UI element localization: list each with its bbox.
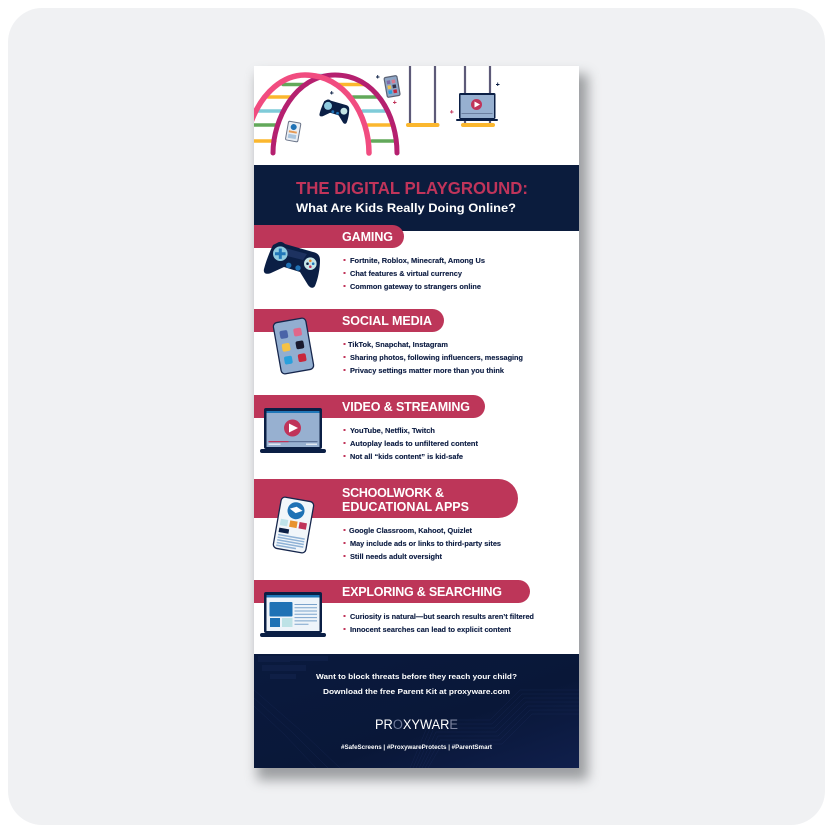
illustration: playground header	[250, 66, 500, 153]
swing two with laptop	[456, 66, 498, 127]
small school phone	[285, 121, 301, 142]
header band	[254, 165, 579, 231]
icon: tablet phone with school app	[273, 497, 314, 553]
gaming banner	[254, 225, 404, 248]
schoolwork bullets: Still needs adult oversight	[350, 552, 443, 561]
schoolwork bullets: Google Classroom, Kahoot, Quizlet	[349, 526, 473, 535]
exploring bullets	[344, 612, 534, 634]
section: gaming	[254, 225, 485, 291]
call to action	[316, 672, 517, 696]
social media heading: SOCIAL MEDIA	[342, 314, 432, 328]
schoolwork bullets: May include ads or links to third-party sites	[350, 539, 501, 548]
video bullets: Not all “kids content” is kid-safe	[350, 452, 463, 461]
exploring bullets: Curiosity is natural—but search results aren’t filtered	[350, 612, 534, 621]
magenta arch	[273, 75, 397, 153]
schoolwork banner	[254, 479, 518, 518]
social media banner	[254, 309, 444, 332]
video heading: VIDEO & STREAMING	[342, 400, 470, 414]
small game controller	[319, 99, 349, 124]
footer panel	[254, 654, 579, 768]
icon: laptop with search results	[260, 592, 326, 637]
icon: laptop with video player	[260, 408, 326, 453]
social media bullets: TikTok, Snapchat, Instagram	[348, 340, 448, 349]
hashtags: #SafeScreens | #ProxywareProtects | #ParentSmart	[341, 745, 492, 751]
video bullets	[344, 426, 479, 461]
call to action: Want to block threats before they reach your child?	[316, 672, 517, 681]
subtitle: What Are Kids Really Doing Online?	[296, 201, 516, 215]
logo: Proxyware: PROXYWARE	[375, 717, 458, 732]
gaming bullets	[344, 256, 485, 291]
section: exploring and searching	[254, 580, 534, 637]
icon: game controller	[264, 242, 320, 288]
swing one	[406, 66, 440, 127]
exploring bullets: Innocent searches can lead to explicit content	[350, 625, 512, 634]
call to action: Download the free Parent Kit at proxyware.com	[323, 687, 510, 696]
panel drop shadow	[257, 74, 588, 780]
gaming heading: GAMING	[342, 230, 393, 244]
pink arch	[250, 75, 369, 153]
social media bullets: Privacy settings matter more than you think	[350, 366, 505, 375]
section: schoolwork and educational apps	[254, 479, 518, 561]
title: THE DIGITAL PLAYGROUND:	[296, 178, 528, 198]
sparkles	[330, 75, 500, 114]
schoolwork bullets	[344, 526, 501, 561]
small social phone	[384, 76, 400, 97]
gaming bullets: Fortnite, Roblox, Minecraft, Among Us	[350, 256, 485, 265]
social media bullets	[344, 340, 523, 375]
exploring banner	[254, 580, 530, 603]
video bullets: YouTube, Netflix, Twitch	[350, 426, 435, 435]
section: social media	[254, 309, 523, 375]
section: video and streaming	[254, 395, 485, 461]
schoolwork heading: SCHOOLWORK &	[342, 486, 444, 500]
video bullets: Autoplay leads to unfiltered content	[350, 439, 479, 448]
exploring heading: EXPLORING & SEARCHING	[342, 585, 502, 599]
gaming bullets: Common gateway to strangers online	[350, 282, 481, 291]
monkey bar rungs	[250, 76, 396, 141]
social media bullets: Sharing photos, following influencers, messaging	[350, 353, 523, 362]
icon: smartphone with apps	[273, 318, 314, 374]
schoolwork heading	[342, 486, 469, 514]
video banner	[254, 395, 485, 418]
gaming bullets: Chat features & virtual currency	[350, 269, 463, 278]
schoolwork heading: EDUCATIONAL APPS	[342, 500, 469, 514]
panel: infographic sheet	[254, 66, 579, 768]
